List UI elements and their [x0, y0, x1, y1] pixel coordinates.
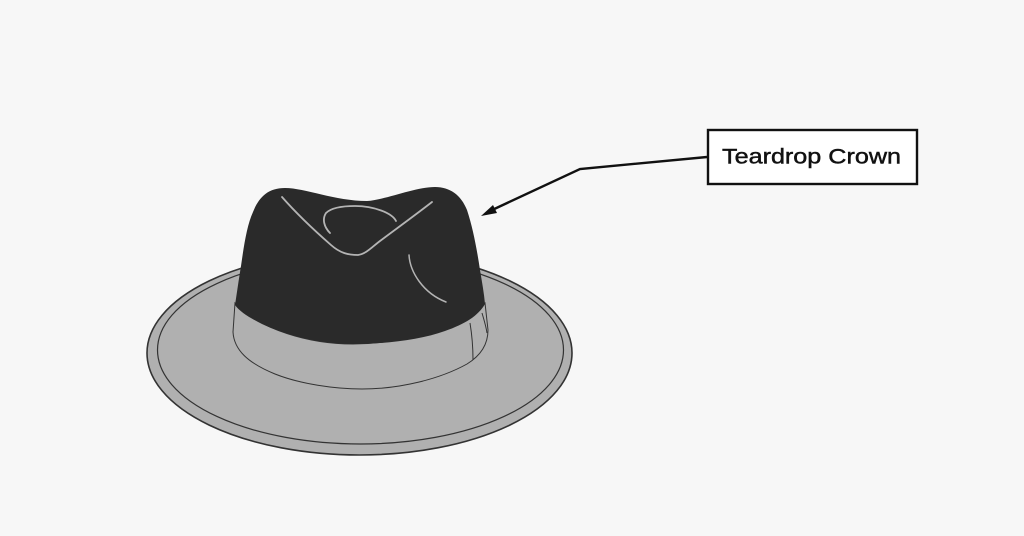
- arrow: label to crown: [481, 157, 707, 216]
- callout label: Teardrop Crown: [722, 144, 901, 168]
- crown: [235, 187, 485, 344]
- band fold lines: [470, 313, 487, 360]
- hat band: [233, 303, 488, 389]
- crown crease: teardrop top: [324, 206, 396, 233]
- crown crease: side dent: [409, 255, 446, 302]
- brim inner stitching: [158, 256, 564, 444]
- callout label: [708, 130, 917, 184]
- crown crease: center pinch: [282, 197, 432, 255]
- hat brim: [147, 251, 572, 455]
- hat illustration: [147, 187, 572, 455]
